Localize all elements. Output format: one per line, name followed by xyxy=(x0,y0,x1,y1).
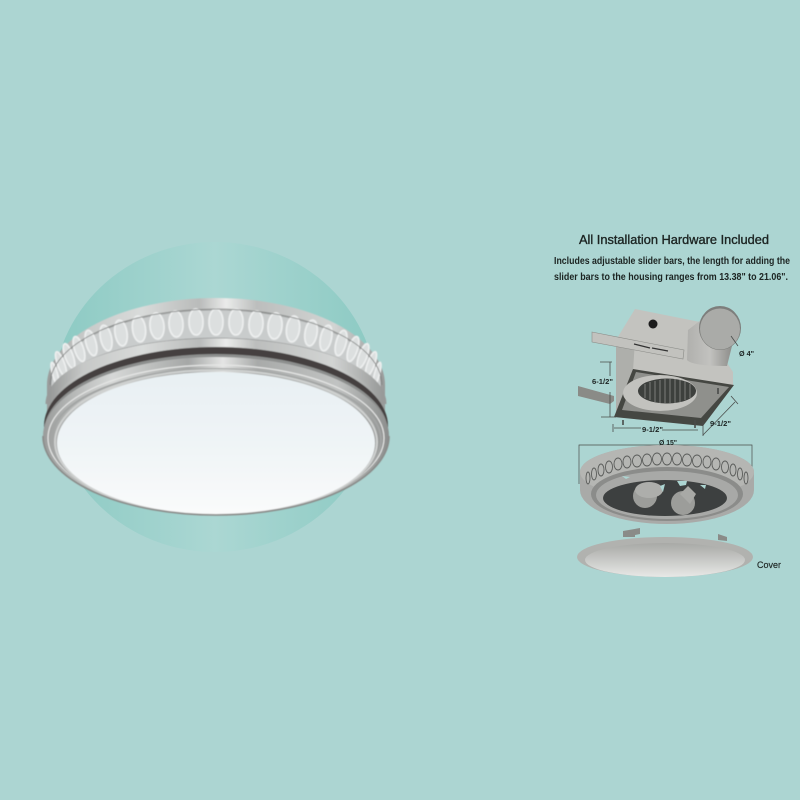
frosted lens xyxy=(57,372,375,514)
mounting screws xyxy=(623,388,718,428)
diameter label: Ø 15" xyxy=(659,438,677,447)
diameter line xyxy=(579,445,752,484)
bulb left xyxy=(633,482,663,508)
upper slider bar xyxy=(592,332,684,359)
bottom plate xyxy=(614,369,734,426)
exploded fixture body xyxy=(579,445,754,524)
blower ring xyxy=(623,375,697,411)
bezel highlight rings xyxy=(43,365,389,515)
cover label: Cover xyxy=(757,560,781,570)
dark groove xyxy=(44,347,388,505)
blower grille xyxy=(638,378,696,404)
heading: All Installation Hardware Included: All Installation Hardware Included xyxy=(579,232,769,247)
cavity openings xyxy=(622,476,706,492)
lower groove ring xyxy=(44,354,388,510)
removable cover xyxy=(577,528,753,577)
cover face xyxy=(585,543,745,577)
metal strip below band xyxy=(50,343,382,404)
bulb right xyxy=(671,486,696,515)
dimension lines xyxy=(600,336,738,436)
body outer ring xyxy=(580,445,754,524)
fan housing diagram xyxy=(578,306,754,436)
lower slider bar xyxy=(578,386,614,404)
upper rim xyxy=(47,298,385,430)
clips xyxy=(623,528,640,537)
dimension labels: 6-1/2" xyxy=(592,377,613,386)
teal halo circle behind lamp xyxy=(53,242,377,552)
mounting hole xyxy=(648,320,658,328)
description text xyxy=(554,256,790,283)
bezel xyxy=(43,357,389,515)
dimension labels: Ø 4" xyxy=(739,349,754,358)
top edge xyxy=(580,445,754,499)
decorative band xyxy=(49,309,383,400)
housing box xyxy=(616,309,733,386)
main ceiling fan light fixture xyxy=(43,298,389,515)
inner ring xyxy=(591,467,743,521)
rim highlight line xyxy=(50,309,382,385)
dimension labels xyxy=(592,349,754,434)
duct tube xyxy=(687,316,733,366)
dimension labels: 9-1/2" xyxy=(710,419,731,428)
dark cavity xyxy=(603,480,727,516)
band links xyxy=(586,453,748,484)
dimension labels: 9-1/2" xyxy=(642,425,663,434)
cover rim xyxy=(577,537,753,577)
